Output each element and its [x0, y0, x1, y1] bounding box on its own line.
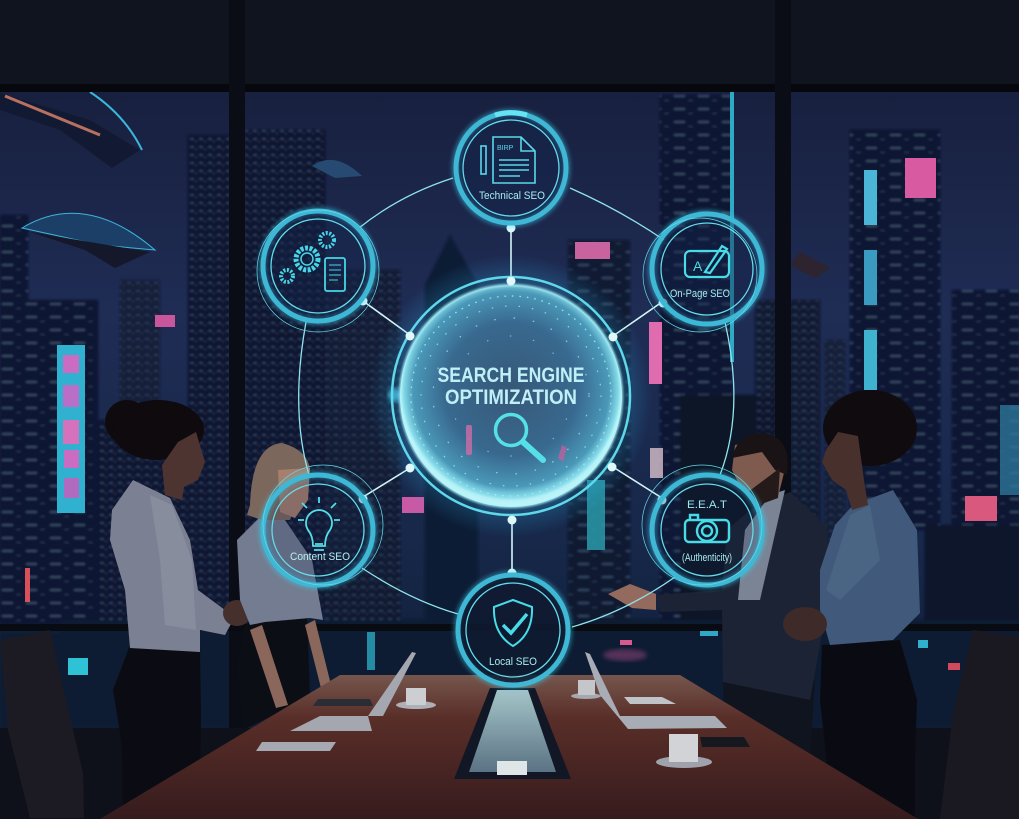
laptop left	[290, 652, 416, 731]
icon: magnifying glass	[496, 414, 543, 460]
icon: camera	[685, 515, 729, 542]
icon: document and pen	[481, 137, 535, 183]
table	[100, 675, 918, 819]
person: woman right	[783, 390, 920, 819]
node: gears (Technical tools)	[257, 210, 379, 332]
icon: shield with check	[494, 600, 532, 646]
neon sign left	[57, 345, 85, 513]
person: blonde woman	[237, 443, 331, 730]
flying vehicles	[0, 92, 830, 278]
central title: SEARCH ENGINE	[438, 364, 584, 387]
node: E.E.A.T (Authenticity): E.E.A.T	[687, 499, 727, 511]
icon: gears and tablet	[281, 233, 345, 291]
icon: light bulb	[298, 497, 340, 550]
node: Local SEO: Local SEO	[489, 656, 537, 668]
icon: signature pad	[685, 246, 729, 277]
person: man in suit	[608, 433, 830, 760]
neon sign right	[905, 158, 936, 198]
node: E.E.A.T (Authenticity)	[642, 465, 762, 585]
node junction dots	[358, 224, 668, 578]
chair left	[0, 630, 84, 818]
cups	[396, 680, 712, 768]
node: Content SEO: Content SEO	[290, 551, 350, 563]
node: Technical SEO: Technical SEO	[479, 190, 545, 202]
central title: OPTIMIZATION	[445, 386, 577, 409]
node: Local SEO	[458, 575, 568, 685]
node: E.E.A.T (Authenticity): (Authenticity)	[682, 552, 732, 564]
node: Technical SEO	[456, 113, 566, 223]
node: Content SEO	[263, 465, 383, 585]
central sphere: Search Engine Optimization	[369, 254, 653, 538]
node: On-Page SEO: A	[693, 258, 703, 274]
person: woman left	[105, 400, 251, 819]
central title	[438, 364, 584, 409]
laptop right	[585, 652, 727, 729]
node: Technical SEO: BIRP	[497, 145, 514, 152]
node: On-Page SEO: On-Page SEO	[670, 288, 730, 300]
chair right	[940, 630, 1019, 819]
connector network	[299, 178, 734, 627]
node: On-Page SEO	[643, 214, 762, 332]
